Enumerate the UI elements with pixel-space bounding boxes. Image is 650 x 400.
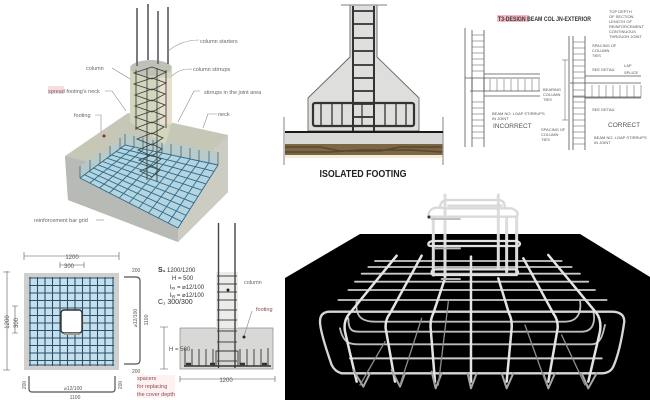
cage tie knot	[427, 215, 431, 219]
column opening	[61, 310, 82, 335]
incorrect labels: IN JOINT	[492, 116, 509, 121]
note top right: THROUGH JOINT	[609, 34, 642, 39]
section concrete footing	[180, 328, 273, 369]
back curled bars	[340, 300, 605, 344]
drawing title: T3-DESIGN BEAM COL JN-EXTERIOR	[498, 17, 592, 23]
correct labels: SPLICE	[624, 70, 639, 75]
section bottom rebar	[184, 348, 271, 366]
specification text: lₓₓ = ⌀12/100	[170, 285, 205, 291]
specification text	[158, 267, 205, 306]
label: column: column	[244, 280, 262, 286]
column cage	[427, 195, 520, 279]
correct labels: BEAM NO. LOAP STIRRUPS	[594, 135, 647, 140]
footing concrete block	[65, 113, 228, 242]
panel: footing plan drawing	[3, 252, 150, 400]
black base	[285, 234, 650, 400]
drawing title	[497, 15, 592, 23]
note top right	[609, 9, 644, 39]
label: column	[86, 66, 130, 79]
label: footing	[242, 307, 273, 338]
ground line	[285, 131, 443, 133]
panel: isolated footing section	[284, 5, 443, 180]
column concrete shaft	[130, 60, 172, 145]
correct labels: TIES	[592, 53, 601, 58]
heading: isolated footing: ISOLATED FOOTING	[320, 168, 406, 180]
incorrect labels	[492, 87, 561, 130]
label: stirrups in the joint area	[178, 90, 262, 122]
label: column stirrups	[172, 67, 231, 76]
correct detail drawing	[562, 36, 641, 150]
column stirrups	[134, 67, 166, 182]
label: stirrups in the joint area: stirrups in the joint area	[204, 90, 262, 96]
note top right: REINFORCEMENT	[609, 24, 644, 29]
label: spacers note: spacers	[137, 376, 157, 382]
correct labels: SPACING OF	[592, 43, 617, 48]
diagonal under bars	[360, 302, 585, 385]
label: reinforcement bar grid: reinforcement bar grid	[34, 218, 88, 224]
section dimensions	[160, 327, 275, 384]
plan slab with rebar mesh	[24, 273, 119, 370]
label: column	[226, 280, 262, 292]
correct labels: COLUMN	[592, 48, 609, 53]
reinforcement bar grid	[80, 134, 218, 228]
lean concrete and soil layers	[284, 117, 443, 165]
plan dimensions	[3, 252, 119, 370]
label: spacers note	[137, 375, 175, 398]
panel: 3D rebar cage on black	[285, 195, 650, 400]
note top right: OF SECTION	[609, 14, 634, 19]
label: spacers note: for replacing	[137, 384, 167, 390]
transverse bars	[338, 261, 607, 300]
bar hooks	[353, 370, 597, 388]
label: column: column	[86, 66, 104, 72]
label: column stirrups: column stirrups	[193, 67, 231, 73]
bottom bent bar detail: 200	[118, 381, 124, 389]
section dimensions: H = 500	[169, 347, 191, 353]
section dimensions: 1200	[219, 378, 233, 384]
panel: 3D footing with labelled reinforcement	[34, 4, 262, 242]
label: column starters: column starters	[200, 39, 238, 45]
note top right: TOP DEPTH	[609, 9, 632, 14]
correct labels: SEE DETAIL	[592, 67, 616, 72]
side bent bar detail	[124, 268, 150, 375]
column starter bars	[137, 4, 168, 66]
specification text: S₁	[158, 267, 166, 274]
side bent bar detail: 200	[132, 268, 141, 274]
plan dimensions: 300	[64, 264, 75, 270]
footing reinforcement cage	[313, 103, 414, 126]
label: spacers note: the cover depth	[137, 392, 175, 398]
label: spread footing neck	[48, 86, 126, 111]
side bent bar detail: 1100	[144, 314, 150, 325]
side bent bar detail: ⌀12/100	[133, 309, 139, 327]
plan dimensions: 1200	[5, 315, 11, 329]
incorrect labels: COLUMN	[543, 92, 560, 97]
correct labels: IN JOINT	[594, 140, 611, 145]
label: spread footing neck: spread footing's neck	[48, 89, 100, 95]
label: column starters	[167, 39, 238, 52]
specification text: 1200/1200	[167, 268, 196, 274]
footing and column concrete	[308, 5, 419, 131]
incorrect labels: TIES	[543, 97, 552, 102]
note top right: LENGTH OF	[609, 19, 632, 24]
incorrect labels: BEAM NO. LOAP STIRRUPS	[492, 111, 545, 116]
panel: footing section specification	[137, 223, 275, 398]
label: footing: footing	[74, 113, 91, 119]
footing rebar mesh	[320, 255, 624, 388]
cage vertical bars	[433, 195, 517, 277]
label: footing: footing	[256, 307, 273, 313]
correct labels	[541, 43, 647, 145]
cage upper bar	[432, 216, 460, 222]
label: footing	[74, 113, 106, 138]
note top right: CONTINUOUS	[609, 29, 636, 34]
correct labels: LAP	[624, 63, 632, 68]
incorrect labels: BEARING	[543, 87, 561, 92]
section column and starter bars	[216, 223, 238, 368]
correct labels: TIES	[541, 137, 550, 142]
label: neck: neck	[218, 112, 230, 118]
correct labels: SEE DETAIL	[592, 107, 616, 112]
correct labels: COLUMN	[541, 132, 558, 137]
cage top stirrups	[428, 200, 518, 217]
incorrect labels: INCORRECT	[493, 123, 532, 130]
correct labels: SPACING OF	[541, 127, 566, 132]
cage lower stirrups	[428, 241, 520, 275]
specification text: lᵧᵧ = ⌀12/100	[170, 293, 205, 299]
label: neck	[203, 112, 230, 128]
column cap line	[341, 4, 387, 6]
side bent bar detail: 200	[132, 369, 141, 375]
correct labels: CORRECT	[608, 122, 640, 129]
bottom bent bar detail: ⌀12/100	[64, 386, 82, 392]
longitudinal bars	[345, 255, 600, 382]
column reinforcement	[353, 6, 374, 131]
specification text: C₁ 300/300	[158, 299, 193, 306]
plan dimensions: 1200	[65, 255, 79, 261]
specification text: H = 500	[172, 276, 194, 282]
incorrect detail drawing	[465, 28, 540, 147]
plan dimensions: 300	[14, 317, 20, 328]
bottom bent bar detail: 200	[22, 381, 28, 389]
panel: beam column junction detail	[465, 9, 647, 150]
front transverse loop	[320, 312, 624, 373]
bottom bent bar detail	[22, 376, 124, 400]
